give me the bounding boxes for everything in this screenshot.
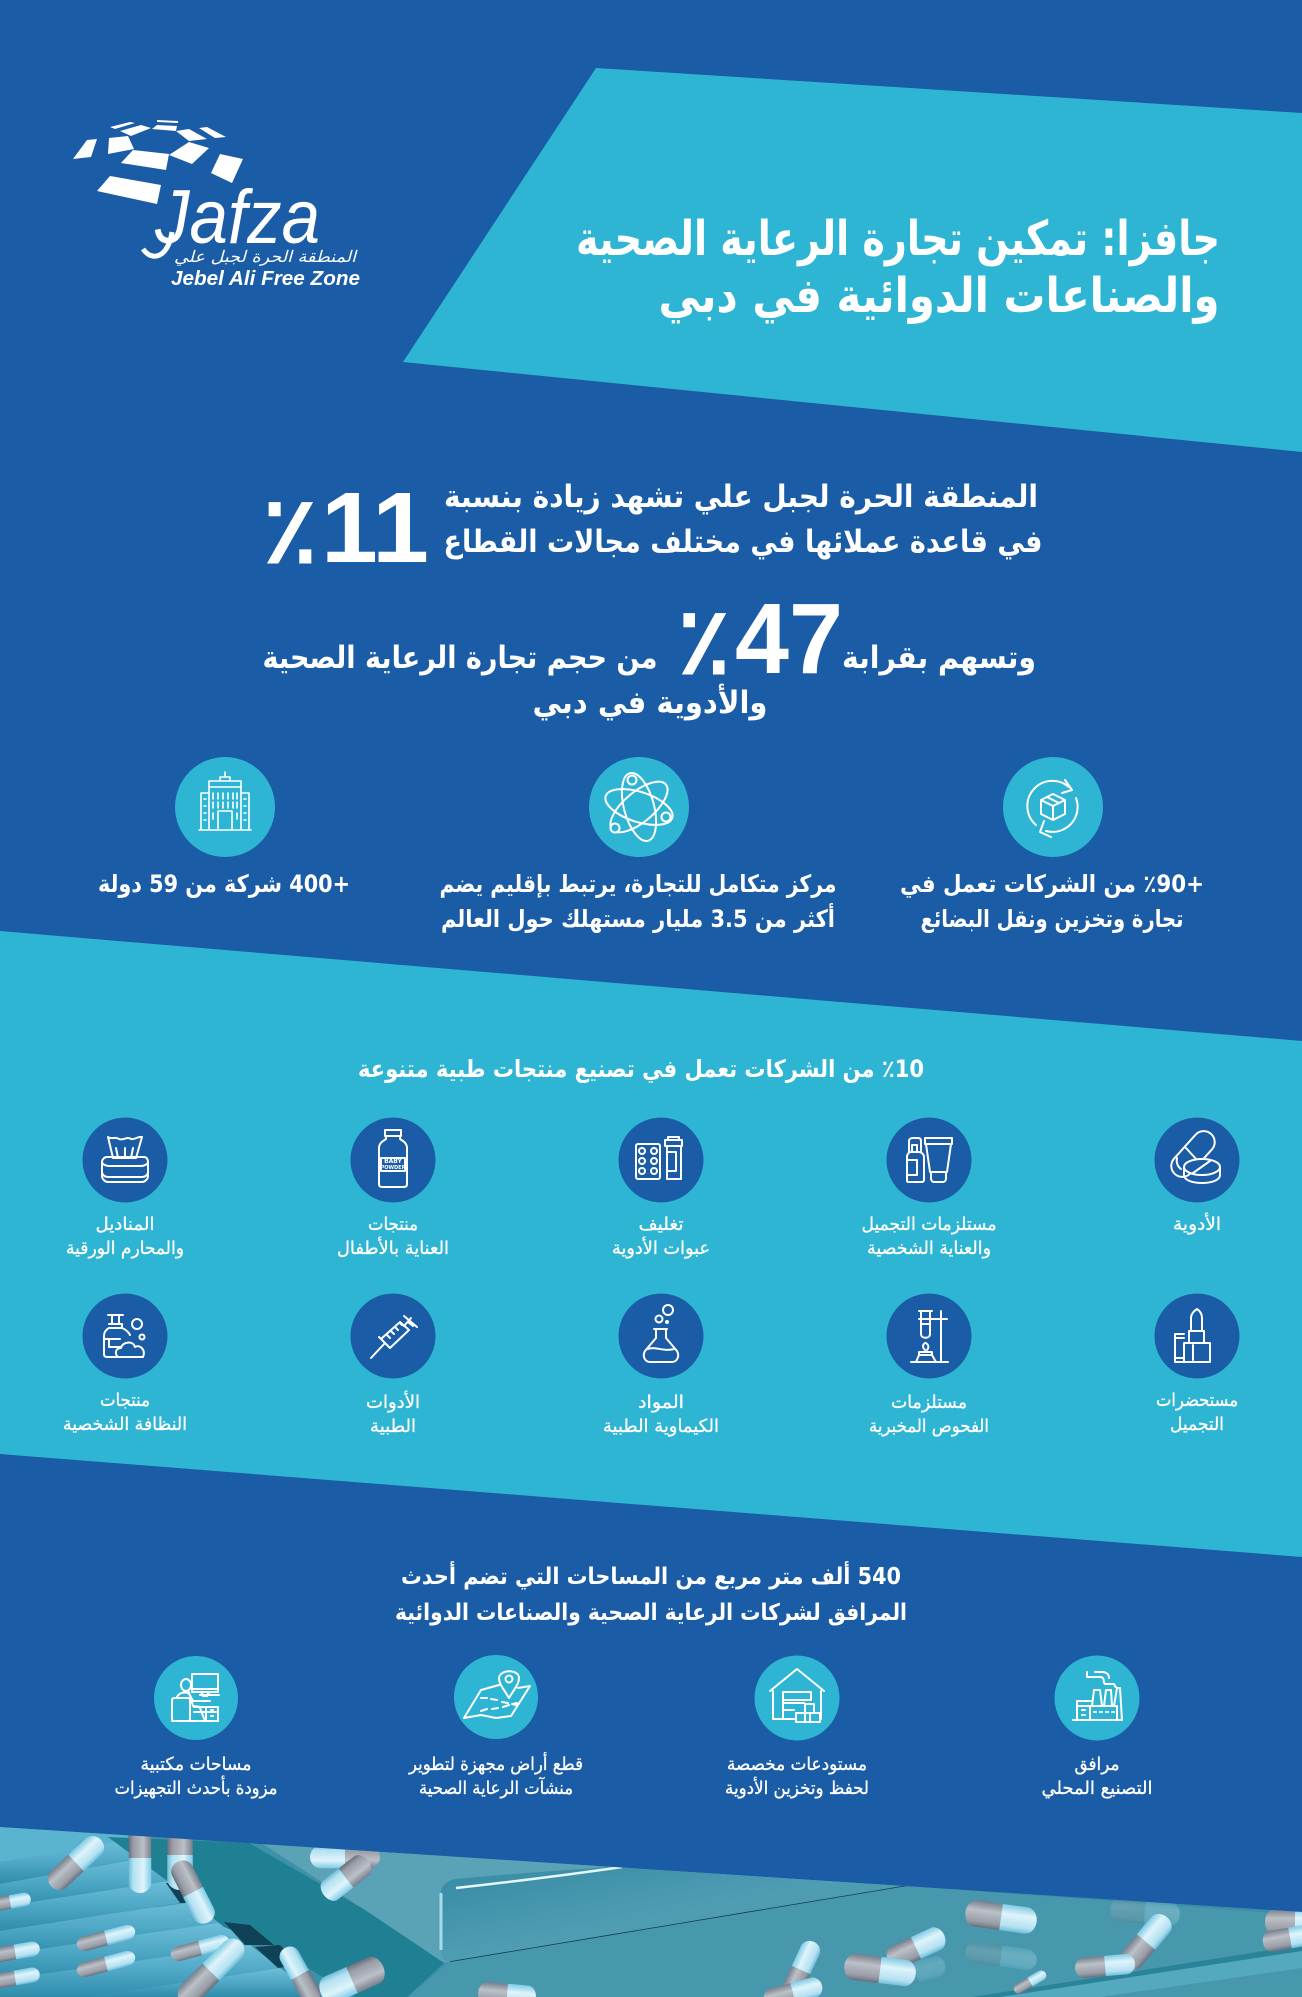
- facility: warehouses: [725, 1656, 869, 1799]
- item: cosmetics: [1154, 1294, 1240, 1435]
- statistic: 47 percent: ٪: [678, 591, 730, 693]
- dark diagonal band: [108, 1837, 444, 1997]
- item: baby products: BABY: [384, 1158, 403, 1165]
- section: facilities heading: 540 ألف متر مربع من المساحات التي تضم أحدث: [401, 1560, 901, 1590]
- fact: logistics: +٪90 من الشركات تعمل في: [900, 870, 1204, 898]
- fact: logistics: تجارة وتخزين ونقل البضائع: [920, 905, 1184, 933]
- item: packaging: عبوات الأدوية: [612, 1237, 710, 1259]
- item: cosmetics supplies: والعناية الشخصية: [867, 1238, 991, 1259]
- statistic: 11 percent: ٪: [263, 480, 317, 582]
- facility: warehouses: مستودعات مخصصة: [727, 1754, 867, 1775]
- item: medicines: [1154, 1118, 1240, 1235]
- item: baby products: POWDER: [381, 1165, 406, 1171]
- facility: land plots: [408, 1655, 583, 1799]
- photo: capsules on conveyor: [0, 1820, 1302, 1997]
- item: baby products: منتجات: [368, 1214, 418, 1235]
- item: cosmetics supplies: [862, 1118, 996, 1259]
- item: tissues: والمحارم الورقية: [66, 1238, 184, 1259]
- statistic: 47 percent: 47: [735, 583, 843, 695]
- logo: Jafza: Jafza: [154, 175, 320, 260]
- floor: [408, 1886, 1302, 1997]
- item: lab supplies: الفحوص المخبرية: [869, 1416, 989, 1437]
- statistic: 11 percent: في قاعدة عملائها في مختلف مجالات القطاع: [444, 524, 1042, 560]
- logo: Jafza: Jebel Ali Free Zone: [171, 268, 360, 290]
- fact: companies: +400 شركة من 59 دولة: [98, 870, 350, 898]
- facility: manufacturing: مرافق: [1074, 1754, 1120, 1775]
- item: cosmetics: مستحضرات: [1156, 1390, 1238, 1411]
- fact: logistics: [900, 757, 1204, 933]
- pale floor behind band: [263, 1844, 894, 1963]
- icon: rotating box: [1003, 757, 1103, 857]
- facility: manufacturing: [1042, 1656, 1152, 1799]
- fact: companies: [98, 757, 350, 898]
- icon: building: [175, 757, 275, 857]
- item: tissues: [66, 1118, 184, 1259]
- item: medical chemicals: الكيماوية الطبية: [603, 1416, 719, 1437]
- statistic: 47 percent: [262, 583, 1036, 721]
- facility: manufacturing: التصنيع المحلي: [1042, 1778, 1152, 1799]
- item: baby products: العناية بالأطفال: [337, 1237, 449, 1259]
- statistic: 11 percent: 11: [321, 472, 429, 584]
- item: personal hygiene: [63, 1294, 187, 1435]
- header teal shape: [403, 68, 1302, 452]
- section: facilities heading: [395, 1560, 907, 1626]
- item: medical tools: [350, 1294, 436, 1437]
- title: [576, 211, 1220, 324]
- fact: trade hub: [440, 757, 836, 933]
- item: medical chemicals: [603, 1294, 719, 1437]
- facility: office spaces: [114, 1656, 278, 1799]
- facility: warehouses: لحفظ وتخزين الأدوية: [725, 1777, 869, 1799]
- item: lab supplies: مستلزمات: [891, 1392, 967, 1413]
- item: medical tools: الأدوات: [366, 1391, 420, 1413]
- fact: trade hub: أكثر من 3.5 مليار مستهلك حول العالم: [441, 903, 835, 933]
- stair steps: [0, 1825, 320, 1997]
- title: والصناعات الدوائية في دبي: [658, 268, 1220, 324]
- logo: Jafza: المنطقة الحرة لجبل علي: [174, 247, 358, 266]
- panel: manufacturing band: [0, 931, 1302, 1557]
- capsules: [0, 1820, 1302, 1997]
- item: cosmetics supplies: مستلزمات التجميل: [862, 1214, 996, 1235]
- item: tissues: المناديل: [96, 1214, 154, 1235]
- item: medical chemicals: المواد: [638, 1392, 684, 1413]
- item: medical tools: الطبية: [370, 1416, 416, 1437]
- statistic: 47 percent: من حجم تجارة الرعاية الصحية: [262, 640, 658, 676]
- raised block: [441, 1866, 907, 1962]
- facility: office spaces: مساحات مكتبية: [140, 1754, 252, 1775]
- logo: Jafza: [73, 120, 360, 290]
- statistic: 11 percent: [263, 472, 1042, 584]
- item: personal hygiene: منتجات: [100, 1390, 150, 1411]
- fact: trade hub: مركز متكامل للتجارة، يرتبط بإقليم يضم: [440, 870, 836, 898]
- item: packaging: تغليف: [638, 1214, 684, 1235]
- item: baby products: [337, 1118, 449, 1259]
- item: packaging: [612, 1118, 710, 1259]
- facility: land plots: قطع أراض مجهزة لتطوير: [408, 1752, 583, 1775]
- facility: office spaces: مزودة بأحدث التجهيزات: [114, 1775, 278, 1799]
- item: personal hygiene: النظافة الشخصية: [63, 1414, 187, 1435]
- item: cosmetics: التجميل: [1170, 1414, 1224, 1435]
- heading: 10 percent: ٪10 من الشركات تعمل في تصنيع منتجات طبية متنوعة: [358, 1055, 924, 1083]
- statistic: 11 percent: المنطقة الحرة لجبل علي تشهد زيادة بنسبة: [444, 479, 1038, 515]
- facility: land plots: منشآت الرعاية الصحية: [419, 1776, 573, 1799]
- icon: atom: [589, 757, 689, 857]
- statistic: 47 percent: والأدوية في دبي: [532, 683, 768, 721]
- item: lab supplies: [869, 1294, 989, 1437]
- statistic: 47 percent: وتسهم بقرابة: [842, 640, 1036, 676]
- item: medicines: الأدوية: [1173, 1213, 1221, 1235]
- section: facilities heading: المرافق لشركات الرعاية الصحية والصناعات الدوائية: [395, 1600, 907, 1626]
